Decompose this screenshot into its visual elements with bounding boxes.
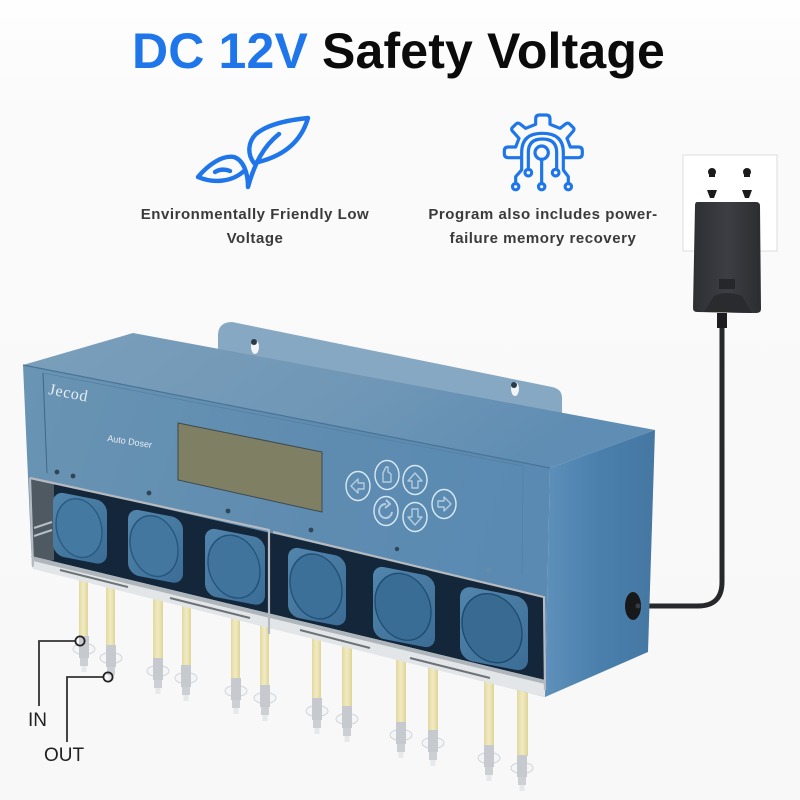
OUT callout: OUT: [44, 745, 84, 766]
icon: leaf: [198, 118, 308, 187]
doser body: [23, 333, 655, 697]
pump cavity: [31, 478, 545, 690]
brand label: Jecod: [47, 381, 90, 406]
indicator LEDs: [55, 470, 491, 572]
silver rim: [30, 478, 545, 690]
IN callout: IN: [28, 710, 47, 731]
pump heads: [53, 491, 528, 672]
caption: low voltage: Environmentally Friendly Low: [141, 206, 369, 223]
mounting bracket: [218, 322, 562, 420]
front face: [23, 365, 550, 697]
side face: [545, 430, 655, 697]
clear cover strip: [31, 556, 545, 697]
power cable: [640, 318, 722, 606]
keypad: [346, 460, 456, 532]
title: DC 12V Safety Voltage: [132, 23, 665, 79]
model label: Auto Doser: [107, 433, 153, 450]
LCD screen: [178, 423, 322, 512]
caption: memory recovery: [428, 206, 658, 247]
IN callout: [28, 636, 85, 731]
wall outlet: [683, 155, 777, 251]
cable grommet: [625, 592, 641, 620]
caption: low voltage: [141, 206, 369, 247]
top face: [23, 333, 655, 468]
caption: memory recovery: failure memory recovery: [450, 230, 636, 247]
caption: memory recovery: Program also includes power-: [428, 206, 658, 223]
caption: low voltage: Voltage: [227, 230, 283, 247]
icon: circuit gear: [504, 115, 582, 190]
power adapter: [693, 202, 761, 328]
tubes and fittings: [73, 565, 533, 791]
OUT callout: [44, 672, 113, 766]
